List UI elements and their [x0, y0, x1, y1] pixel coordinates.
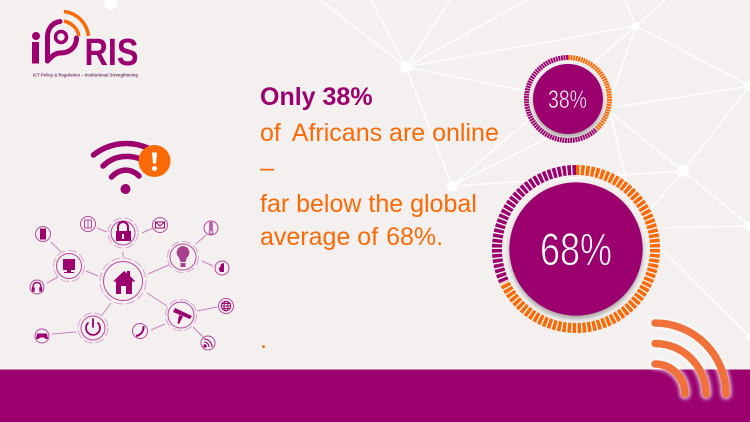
- alert badge: [138, 145, 170, 177]
- background network pattern: [104, 0, 750, 341]
- icon: light bulb: [177, 246, 189, 267]
- logo: iPRIS: [32, 12, 138, 78]
- gauge value: 68%: [540, 224, 612, 275]
- icon: phone: [136, 326, 144, 336]
- gauge disc: [509, 182, 643, 316]
- logo pin mark: [48, 22, 76, 61]
- gauge ticks purple: [497, 170, 576, 282]
- icon: wifi with alert badge: [94, 143, 170, 194]
- logo orange signal arcs: [64, 12, 88, 36]
- icon: window: [84, 220, 92, 228]
- logo text RIS: RIS: [84, 32, 138, 74]
- icon: mail: [156, 222, 164, 228]
- smart home network diagram: [30, 216, 234, 350]
- gauge value: 38%: [548, 86, 587, 114]
- bottom band: [0, 370, 750, 422]
- line: far below the global: far below the global: [260, 190, 477, 218]
- icon: tablet: [40, 228, 46, 240]
- icon: hand: [218, 263, 224, 272]
- line: average of 68%: average of 68%.: [260, 223, 443, 251]
- icon: power button: [86, 319, 100, 335]
- icon: monitor: [63, 259, 75, 273]
- gauge ticks purple: [526, 57, 596, 140]
- line: dash: –: [260, 154, 274, 182]
- icon: thermometer: [209, 222, 213, 234]
- signal glow: [655, 323, 726, 394]
- logo letter i: [32, 32, 40, 64]
- icon: small wifi: [204, 339, 212, 347]
- node rings: [30, 216, 234, 350]
- gauge ticks orange: [568, 58, 609, 129]
- wifi arcs: [94, 143, 150, 177]
- line: trailing dot: .: [260, 326, 267, 354]
- headline text: [260, 83, 499, 354]
- icon: gamepad: [36, 334, 48, 339]
- logo tagline: ICT Policy & Regulation – Institutional Strengthening: [33, 72, 138, 78]
- icon: house: [113, 271, 136, 294]
- icon: headphones: [32, 282, 42, 291]
- gauge disc: [533, 64, 603, 134]
- dashed outer rings: [54, 218, 198, 343]
- line: of Africans are online: of Africans are online: [260, 119, 499, 147]
- highlight: only 38%: Only 38%: [260, 83, 373, 111]
- icon: padlock: [116, 221, 131, 241]
- large gauge: 68%: [497, 170, 655, 328]
- icon: globe: [221, 301, 231, 311]
- gauge ticks orange: [504, 170, 655, 328]
- connector lines: [47, 228, 217, 337]
- wifi dot: [120, 184, 130, 194]
- small gauge: 38%: [526, 57, 609, 140]
- icon: security camera: [173, 308, 192, 324]
- bottom right signal icon: [655, 323, 726, 394]
- signal arcs: [655, 323, 726, 394]
